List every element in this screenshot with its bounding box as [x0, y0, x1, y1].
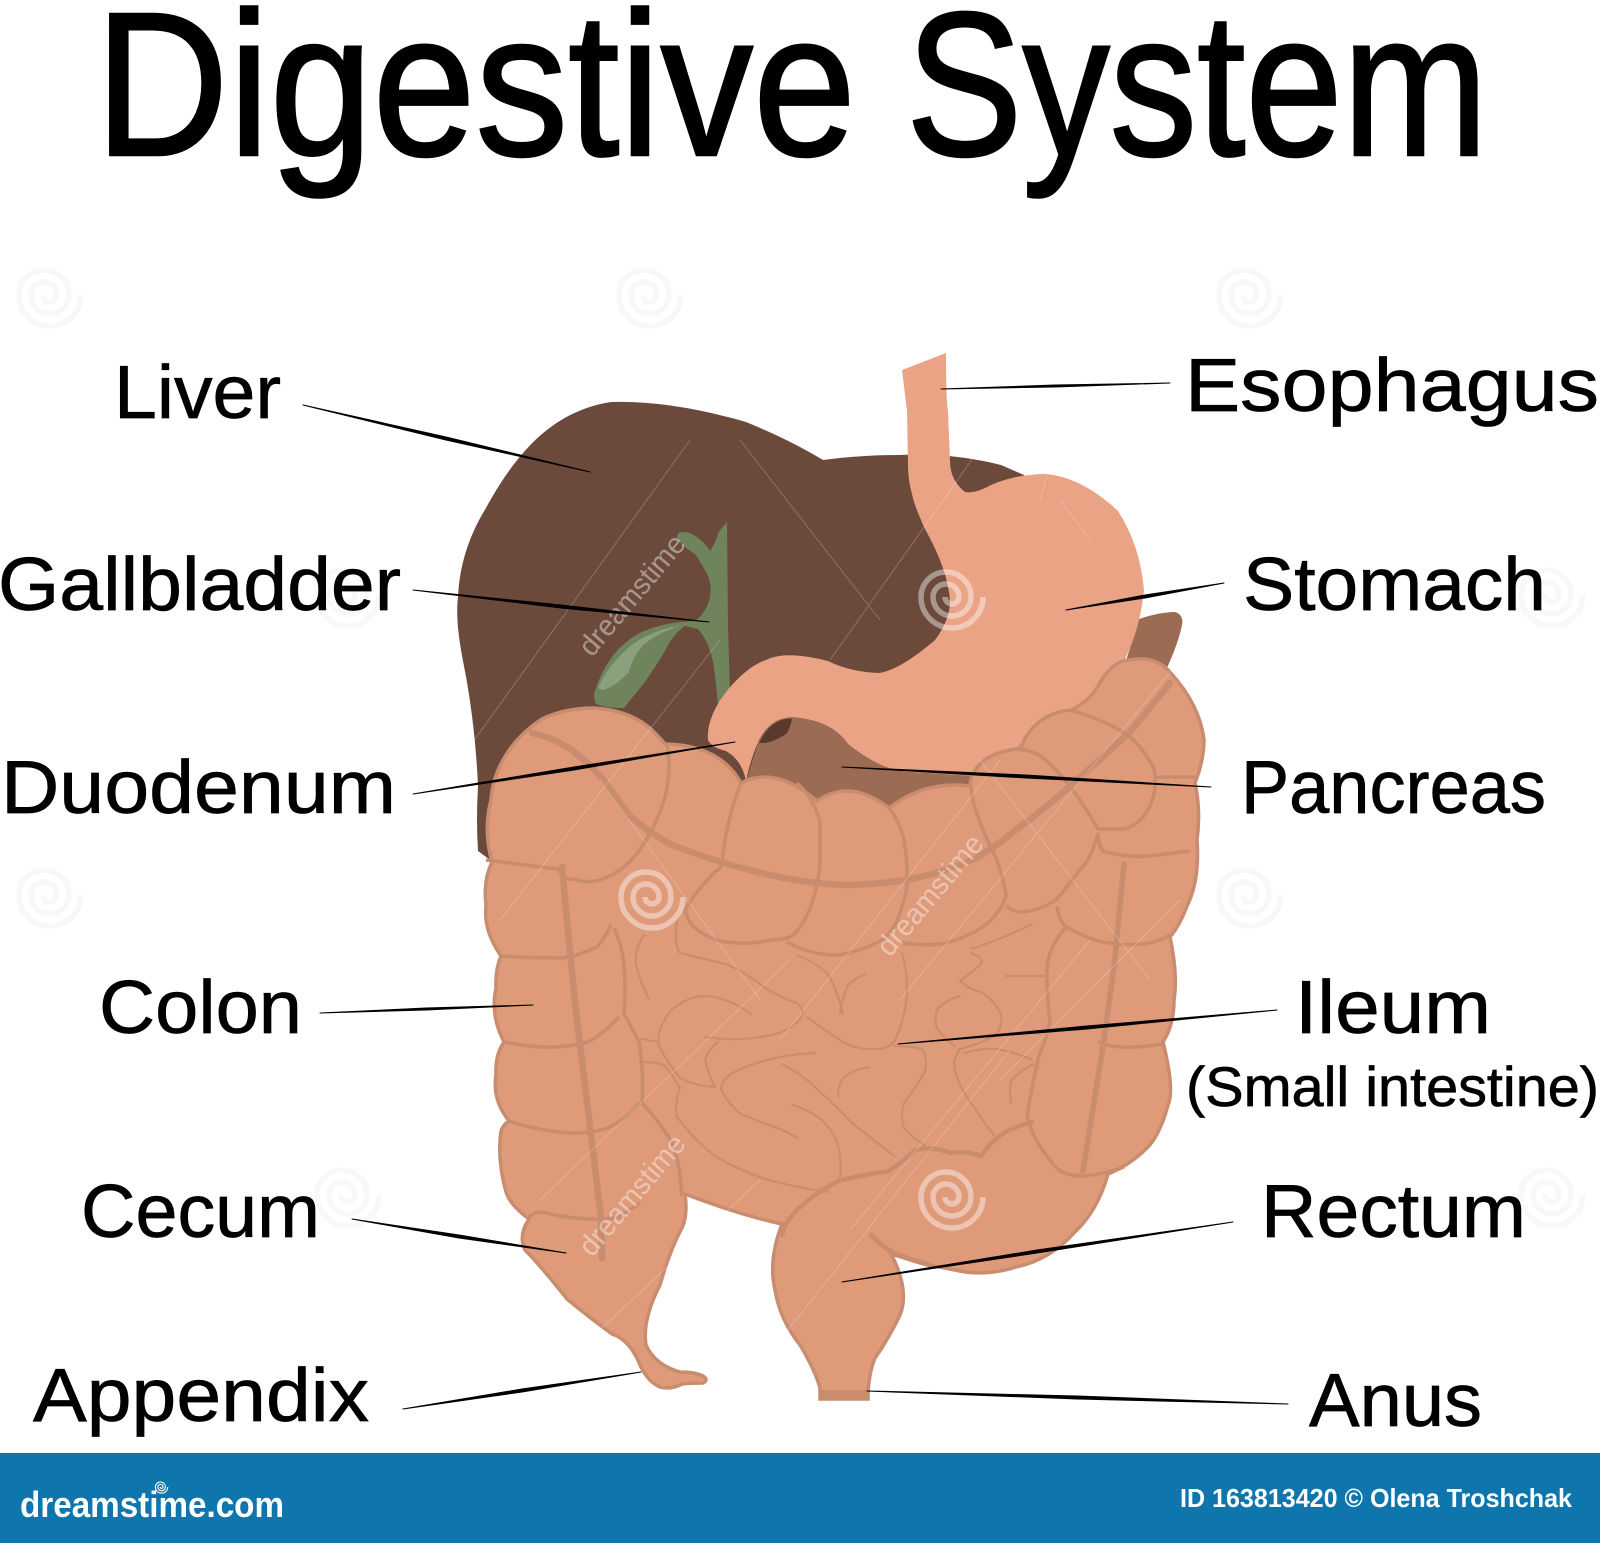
pancreas tail: [1120, 612, 1182, 680]
label: Cecum: [81, 1169, 566, 1253]
dreamstime watermark marks: dreamstime: [572, 528, 692, 662]
label: Esophagus: Esophagus: [1185, 343, 1599, 427]
label: Appendix: [33, 1353, 641, 1437]
dreamstime watermark marks: [572, 528, 990, 1262]
pancreas body: [746, 717, 985, 815]
label: Colon: Colon: [99, 965, 302, 1049]
label: Duodenum: [1, 742, 735, 829]
stomach watermark lines: [460, 420, 1180, 1340]
small intestine folds: [636, 921, 1047, 1192]
label: Stomach: [1066, 542, 1546, 626]
label: Ileum (Small intestine): [898, 965, 1599, 1118]
title: [95, 0, 1488, 199]
footer credit: ID 163813420 © Olena Troshchak: [1180, 1483, 1573, 1513]
label: Ileum (Small intestine): (Small intestine): [1186, 1055, 1599, 1118]
large and small intestine body: [485, 659, 1204, 1399]
label: Rectum: Rectum: [1261, 1169, 1526, 1253]
label: Duodenum: Duodenum: [1, 745, 396, 829]
label: Rectum: [842, 1169, 1526, 1282]
pancreas shadow: [759, 719, 792, 743]
label: Anus: Anus: [1309, 1358, 1482, 1442]
footer banner: [0, 1453, 1600, 1543]
label: Esophagus: [941, 343, 1599, 427]
stomach and esophagus: [708, 353, 1144, 790]
footer logo: dreamstime.com: [20, 1484, 284, 1525]
colon bands: [532, 683, 1170, 1265]
liver: [457, 402, 1024, 880]
label: Cecum: Cecum: [81, 1169, 320, 1253]
label: Gallbladder: [0, 542, 709, 626]
dreamstime watermark marks: dreamstime: [572, 1128, 692, 1262]
label: Liver: Liver: [114, 350, 281, 434]
faint background watermark: [19, 270, 1583, 1226]
colon segment lines: [486, 711, 1195, 1219]
label: Colon: [99, 965, 533, 1049]
digestive organs diagram: [457, 353, 1204, 1399]
label: Anus: [867, 1358, 1482, 1442]
dreamstime watermark marks: dreamstime: [870, 828, 990, 962]
label: Pancreas: [842, 745, 1546, 829]
label: Liver: [114, 350, 590, 472]
anus band: [820, 1390, 868, 1399]
label: Gallbladder: Gallbladder: [0, 542, 401, 626]
label: Stomach: Stomach: [1243, 542, 1546, 626]
label: Ileum (Small intestine): Ileum: [1295, 965, 1491, 1049]
label: Appendix: Appendix: [33, 1353, 369, 1437]
gallbladder and bile ducts: [594, 522, 730, 708]
label: Pancreas: Pancreas: [1241, 745, 1546, 829]
